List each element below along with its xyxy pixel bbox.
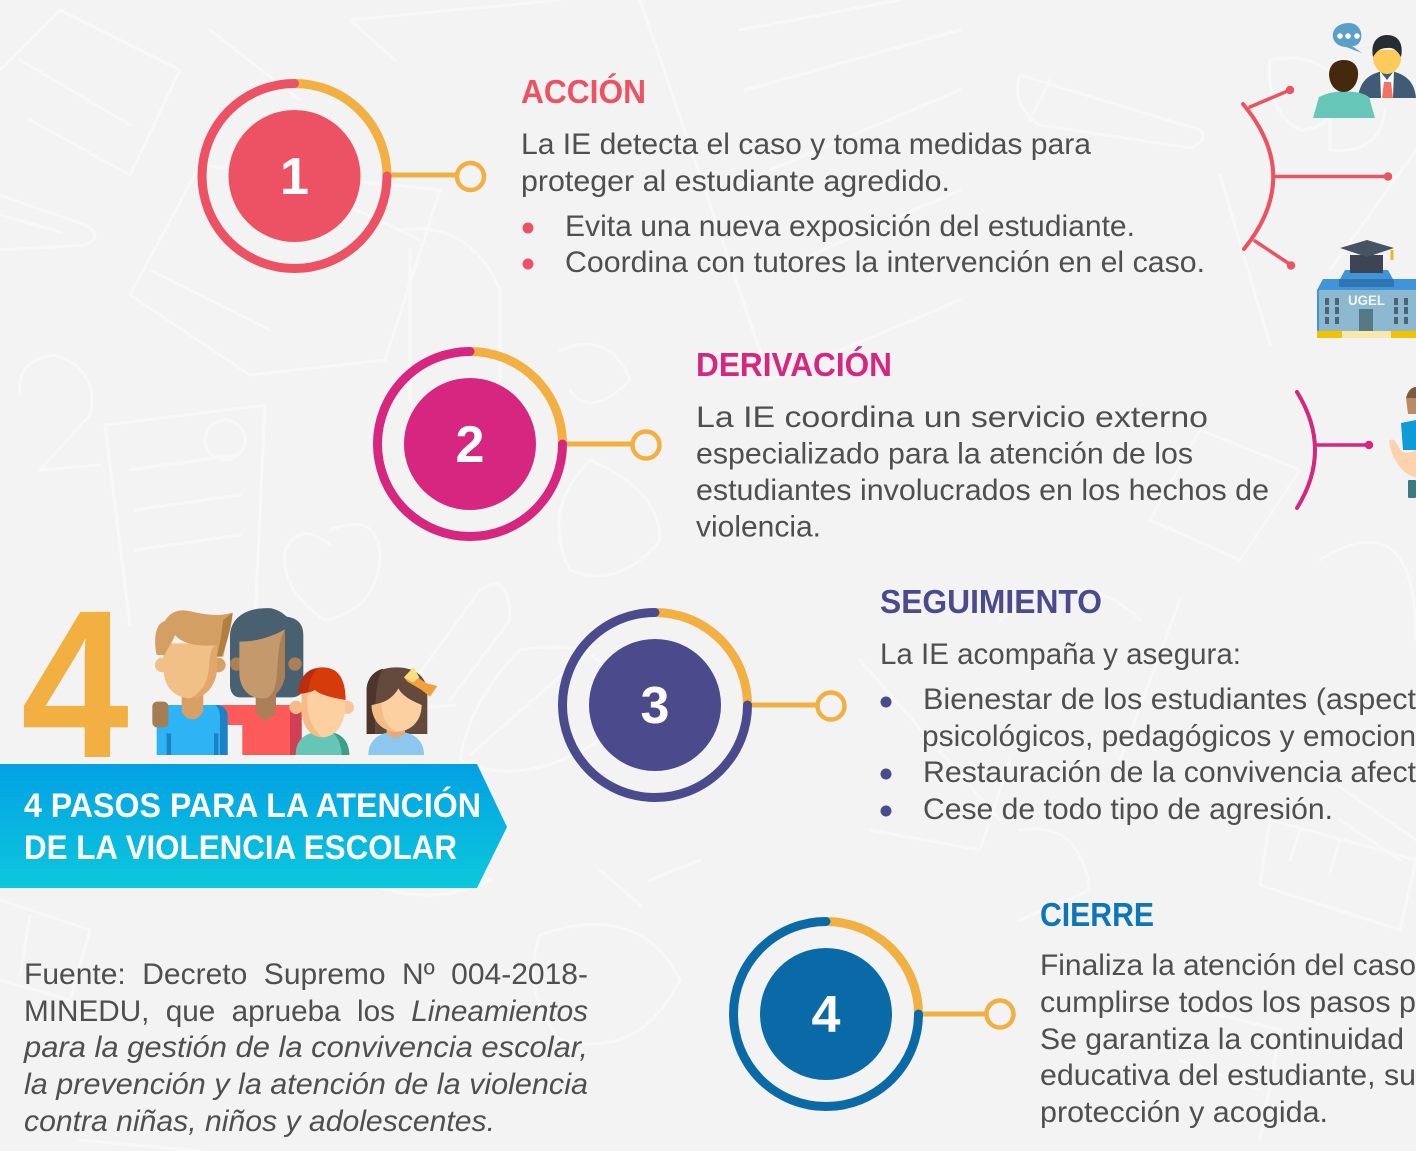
ring 3 with connector xyxy=(562,612,844,798)
ring 4 with connector: 4 xyxy=(812,986,841,1044)
text block: cierre: educativa del estudiante, su xyxy=(1040,1059,1416,1092)
heading: cierre: CIERRE xyxy=(1040,896,1154,933)
text block: cierre: Finaliza la atención del caso xyxy=(1040,949,1416,982)
heading: seguimiento: SEGUIMIENTO xyxy=(880,583,1102,620)
ring 1 with connector: 1 xyxy=(280,148,309,206)
text block: derivación: La IE coordina un servicio externo xyxy=(696,401,1208,434)
text block: cierre: Se garantiza la continuidad xyxy=(1040,1023,1404,1056)
text block: cierre: cumplirse todos los pasos p xyxy=(1040,986,1416,1019)
large number 4: 4 xyxy=(21,565,129,802)
step 1: acción xyxy=(202,23,1416,338)
branch connector: derivación xyxy=(1297,392,1372,508)
banner heading: DE LA VIOLENCIA ESCOLAR xyxy=(24,829,457,867)
step 3: seguimiento xyxy=(562,583,1416,826)
source note: la prevención y la atención de la violencia xyxy=(24,1068,588,1101)
heading: derivación: DERIVACIÓN xyxy=(696,346,892,383)
banner heading xyxy=(24,785,481,867)
text block: acción: Evita una nueva exposición del estudiante. xyxy=(565,210,1135,243)
source note: contra niñas, niños y adolescentes. xyxy=(24,1105,495,1138)
source note: MINEDU, que aprueba los Lineamientos xyxy=(24,995,588,1028)
text block: seguimiento: Cese de todo tipo de agresión. xyxy=(923,793,1333,826)
text block: acción: La IE detecta el caso y toma medidas para xyxy=(521,128,1092,161)
source note: Fuente: Decreto Supremo Nº 004-2018- xyxy=(24,958,588,991)
text block: cierre xyxy=(1040,949,1416,1129)
source note: para la gestión de la convivencia escolar, xyxy=(23,1031,588,1064)
icon: student in caring hand xyxy=(1389,387,1416,498)
boy xyxy=(289,667,354,755)
text block: seguimiento: psicológicos, pedagógicos y emocion xyxy=(922,720,1416,753)
text block: derivación: violencia. xyxy=(696,510,821,544)
icon: UGEL school building xyxy=(1317,240,1416,338)
ring 2 with connector xyxy=(378,352,660,536)
text block: acción: Coordina con tutores la intervención en el caso. xyxy=(565,246,1205,279)
text block: seguimiento: La IE acompaña y asegura: xyxy=(880,638,1241,671)
step 2: derivación xyxy=(378,346,1416,544)
text block: acción xyxy=(521,128,1205,279)
ring 4 with connector xyxy=(734,922,1014,1106)
ring 2 with connector: 2 xyxy=(456,416,484,474)
text block: seguimiento: Bienestar de los estudiantes (aspect xyxy=(923,683,1416,716)
ring 1 with connector xyxy=(202,84,484,268)
mother xyxy=(217,608,303,755)
icon: UGEL school building: UGEL xyxy=(1348,292,1385,308)
father xyxy=(152,610,233,755)
banner heading: 4 PASOS PARA LA ATENCIÓN xyxy=(24,785,481,825)
girl xyxy=(367,667,437,755)
text block: seguimiento xyxy=(880,638,1416,826)
text block: derivación: estudiantes involucrados en los hechos de xyxy=(696,474,1269,507)
text block: derivación: especializado para la atención de los xyxy=(696,438,1193,470)
ring 3 with connector: 3 xyxy=(641,677,669,735)
text block: seguimiento: Restauración de la convivencia afect xyxy=(923,756,1416,789)
heading: acción: ACCIÓN xyxy=(521,73,646,110)
branch connector: acción xyxy=(1243,88,1390,268)
icon: family of four xyxy=(152,608,437,755)
text block: acción: proteger al estudiante agredido. xyxy=(521,165,950,198)
step 4: cierre xyxy=(734,896,1416,1129)
text block: cierre: protección y acogida. xyxy=(1040,1096,1328,1129)
source note xyxy=(23,958,588,1138)
icon: conversation between two people xyxy=(1313,23,1416,118)
text block: derivación xyxy=(696,401,1269,544)
banner: title ribbon xyxy=(0,764,507,888)
